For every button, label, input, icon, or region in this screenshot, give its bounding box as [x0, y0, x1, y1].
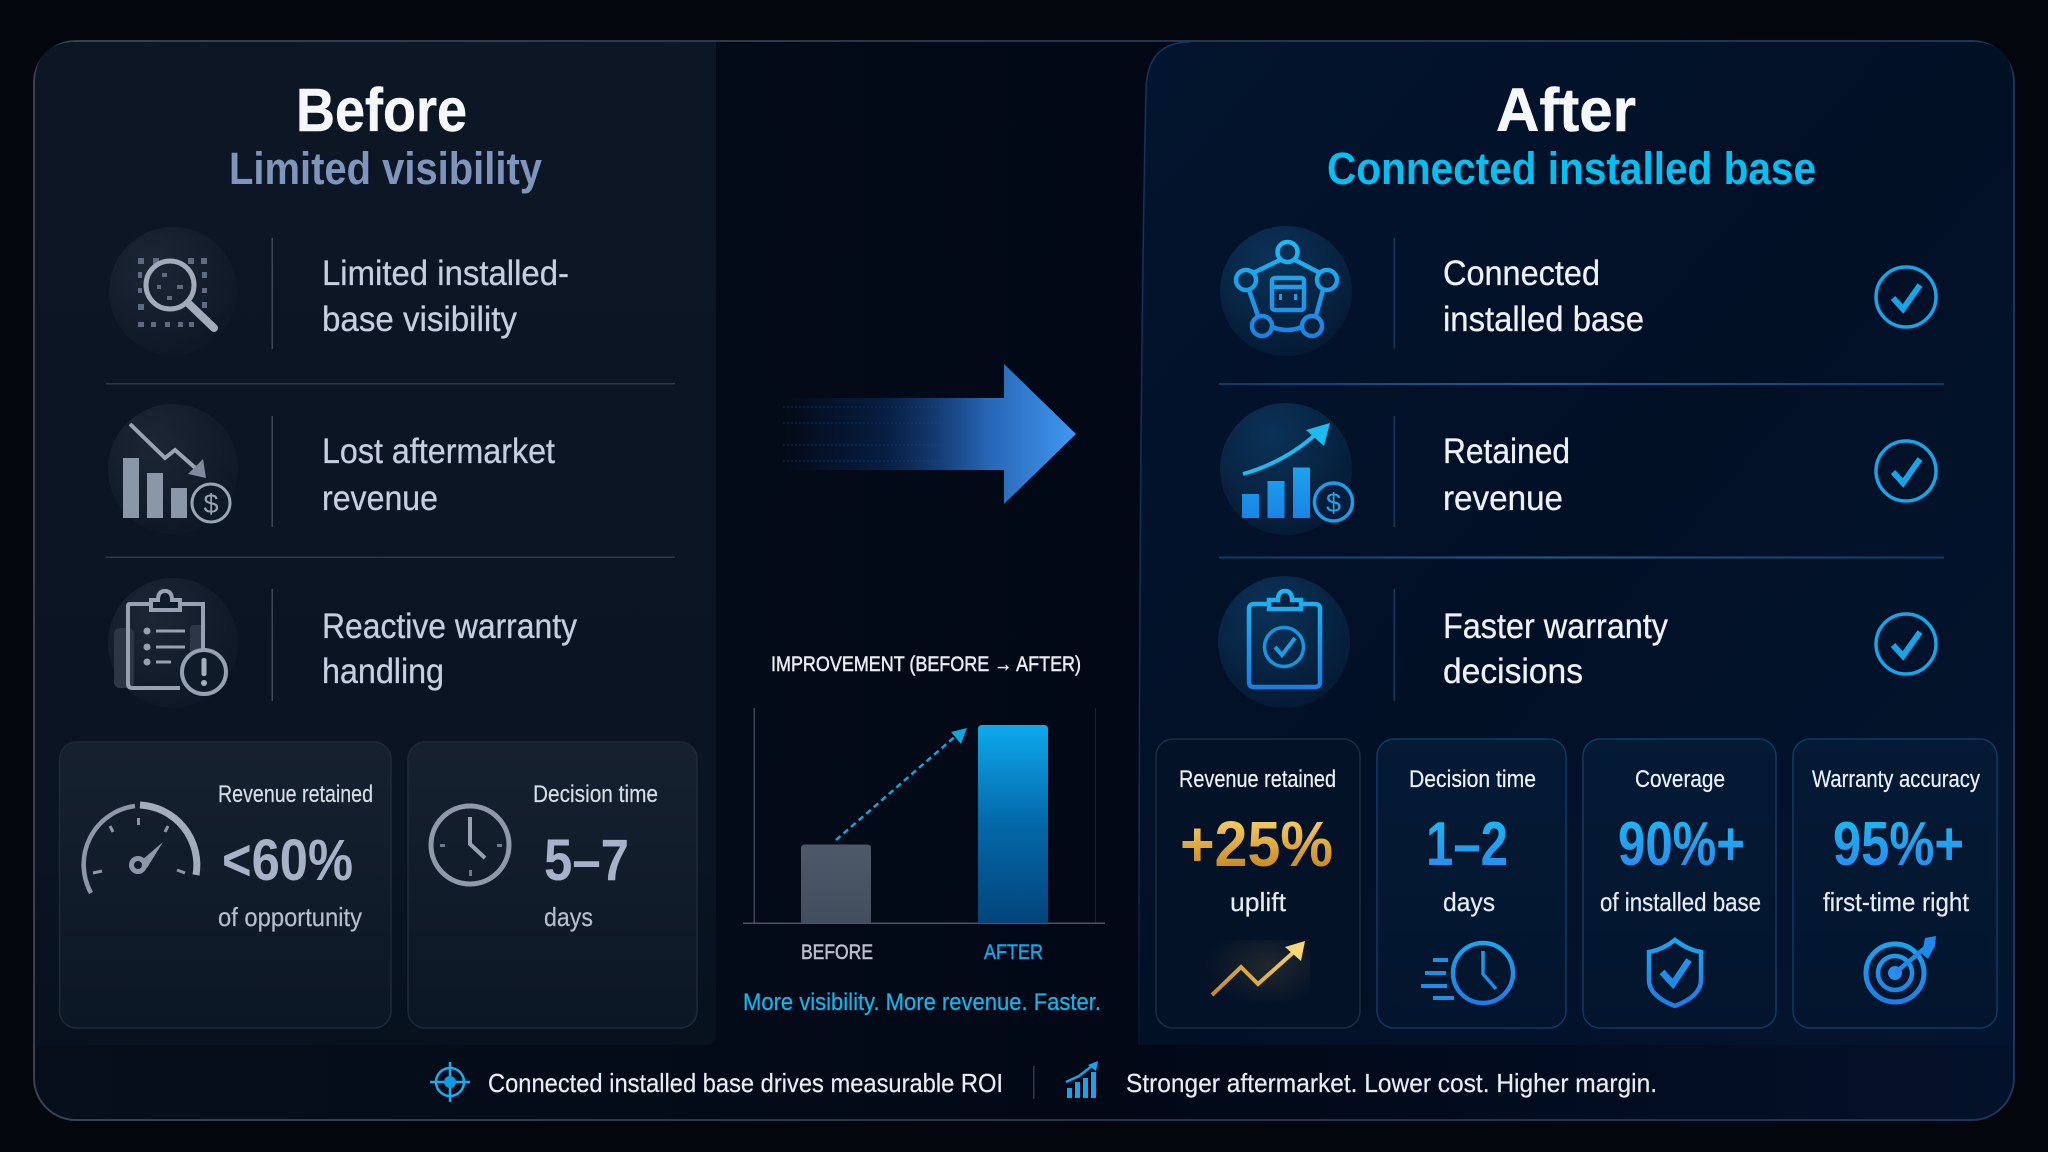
icon: shield [1649, 940, 1701, 1006]
card: coverage after [1583, 739, 1776, 1028]
bar: before [801, 844, 871, 923]
row text [322, 254, 569, 339]
row text: Reactive warranty [322, 607, 577, 646]
card: decision time before: 5–7 [544, 828, 629, 893]
divider [272, 589, 273, 701]
before heading: Limited visibility [229, 143, 542, 194]
card: decision time before [408, 742, 697, 1028]
before panel background [35, 42, 716, 1045]
row: lost aftermarket revenue [108, 404, 555, 534]
card: decision time before: Decision time [533, 781, 658, 808]
icon: clock [431, 806, 509, 884]
card: decision time after: days [1443, 887, 1495, 917]
row text: handling [322, 652, 444, 691]
icon: gauge [84, 805, 197, 893]
icon: clipboard with check [1218, 576, 1350, 708]
card: warranty accuracy after: first-time right [1823, 887, 1970, 917]
before heading [229, 76, 542, 194]
row text: revenue [1443, 479, 1563, 518]
after panel background [1139, 42, 2013, 1045]
divider [272, 238, 273, 349]
card: decision time after [1377, 739, 1566, 1028]
card: revenue retained before: <60% [222, 828, 353, 893]
row text [1443, 432, 1570, 518]
card: revenue retained after: +25% [1180, 808, 1333, 880]
card: revenue retained before: Revenue retained [218, 781, 373, 808]
row: reactive warranty handling [108, 578, 577, 708]
icon: bars with arrow [1066, 1061, 1098, 1098]
row text [322, 607, 577, 691]
card: coverage after: of installed base [1600, 887, 1761, 917]
divider [1394, 589, 1395, 701]
divider [1394, 238, 1395, 349]
bar: after [978, 725, 1048, 923]
icon: falling bars and coin [108, 404, 238, 534]
trend arrow dashed [836, 728, 967, 840]
after heading: After [1496, 76, 1636, 144]
after heading [1327, 76, 1816, 194]
icon: clipboard with alert [108, 578, 238, 708]
row: limited installed-base visibility [109, 227, 569, 355]
icon: fast clock [1421, 943, 1513, 1003]
row text: Faster warranty [1443, 607, 1668, 646]
card: decision time after: 1–2 [1426, 810, 1508, 879]
icon: rising bars and coin [1220, 403, 1352, 535]
icon: falling bars and coin: $ [203, 489, 219, 519]
icon: check [1876, 267, 1936, 327]
icon: target [1866, 936, 1936, 1002]
icon: network [1220, 226, 1352, 356]
card: decision time before: days [544, 902, 593, 932]
footer text left: Connected installed base drives measurable ROI [488, 1068, 1003, 1098]
row text: Limited installed- [322, 254, 569, 293]
card: warranty accuracy after: Warranty accuracy [1812, 766, 1980, 793]
row text [322, 432, 555, 518]
chart: improvement [743, 653, 1105, 1016]
chart title: IMPROVEMENT (BEFORE → AFTER) [771, 653, 1081, 676]
row: retained revenue [1220, 403, 1936, 535]
card: warranty accuracy after [1793, 739, 1997, 1028]
axis label: after: AFTER [984, 941, 1043, 964]
icon: crosshair [430, 1062, 470, 1102]
row: faster warranty decisions [1218, 576, 1936, 708]
icon: check [1876, 441, 1936, 501]
icon: gold trend arrow [1205, 940, 1310, 1005]
card: decision time after: Decision time [1409, 766, 1536, 793]
row: connected installed base [1220, 226, 1936, 356]
row text: base visibility [322, 300, 517, 339]
card: revenue retained after: uplift [1230, 887, 1287, 917]
icon: check [1876, 614, 1936, 674]
divider [1394, 416, 1395, 527]
row text: installed base [1443, 300, 1644, 339]
card: coverage after: 90%+ [1618, 810, 1745, 879]
footer text right: Stronger aftermarket. Lower cost. Higher margin. [1126, 1068, 1657, 1098]
row text: revenue [322, 479, 438, 518]
card: revenue retained before [60, 742, 391, 1028]
icon: magnifier over grid [109, 227, 237, 355]
row text: Connected [1443, 254, 1600, 293]
card: revenue retained after [1156, 739, 1360, 1028]
row text: decisions [1443, 652, 1583, 691]
footer bar [430, 1061, 1657, 1102]
divider [272, 416, 273, 527]
after heading: Connected installed base [1327, 143, 1816, 194]
panel: before [35, 42, 716, 1045]
card: revenue retained after: Revenue retained [1179, 766, 1336, 793]
before heading: Before [296, 76, 467, 144]
chart caption: More visibility. More revenue. Faster. [743, 989, 1101, 1016]
row text [1443, 254, 1644, 339]
row text: Lost aftermarket [322, 432, 555, 471]
arrow: before to after [783, 364, 1076, 504]
panel: after [1139, 42, 2013, 1045]
row text [1443, 607, 1668, 691]
card: coverage after: Coverage [1635, 766, 1725, 793]
after panel edge [1139, 42, 1190, 1045]
axis label: before: BEFORE [801, 941, 873, 964]
row text: Retained [1443, 432, 1570, 471]
icon: rising bars and coin: $ [1326, 488, 1341, 518]
card: revenue retained before: of opportunity [218, 902, 362, 932]
card: warranty accuracy after: 95%+ [1833, 810, 1964, 879]
